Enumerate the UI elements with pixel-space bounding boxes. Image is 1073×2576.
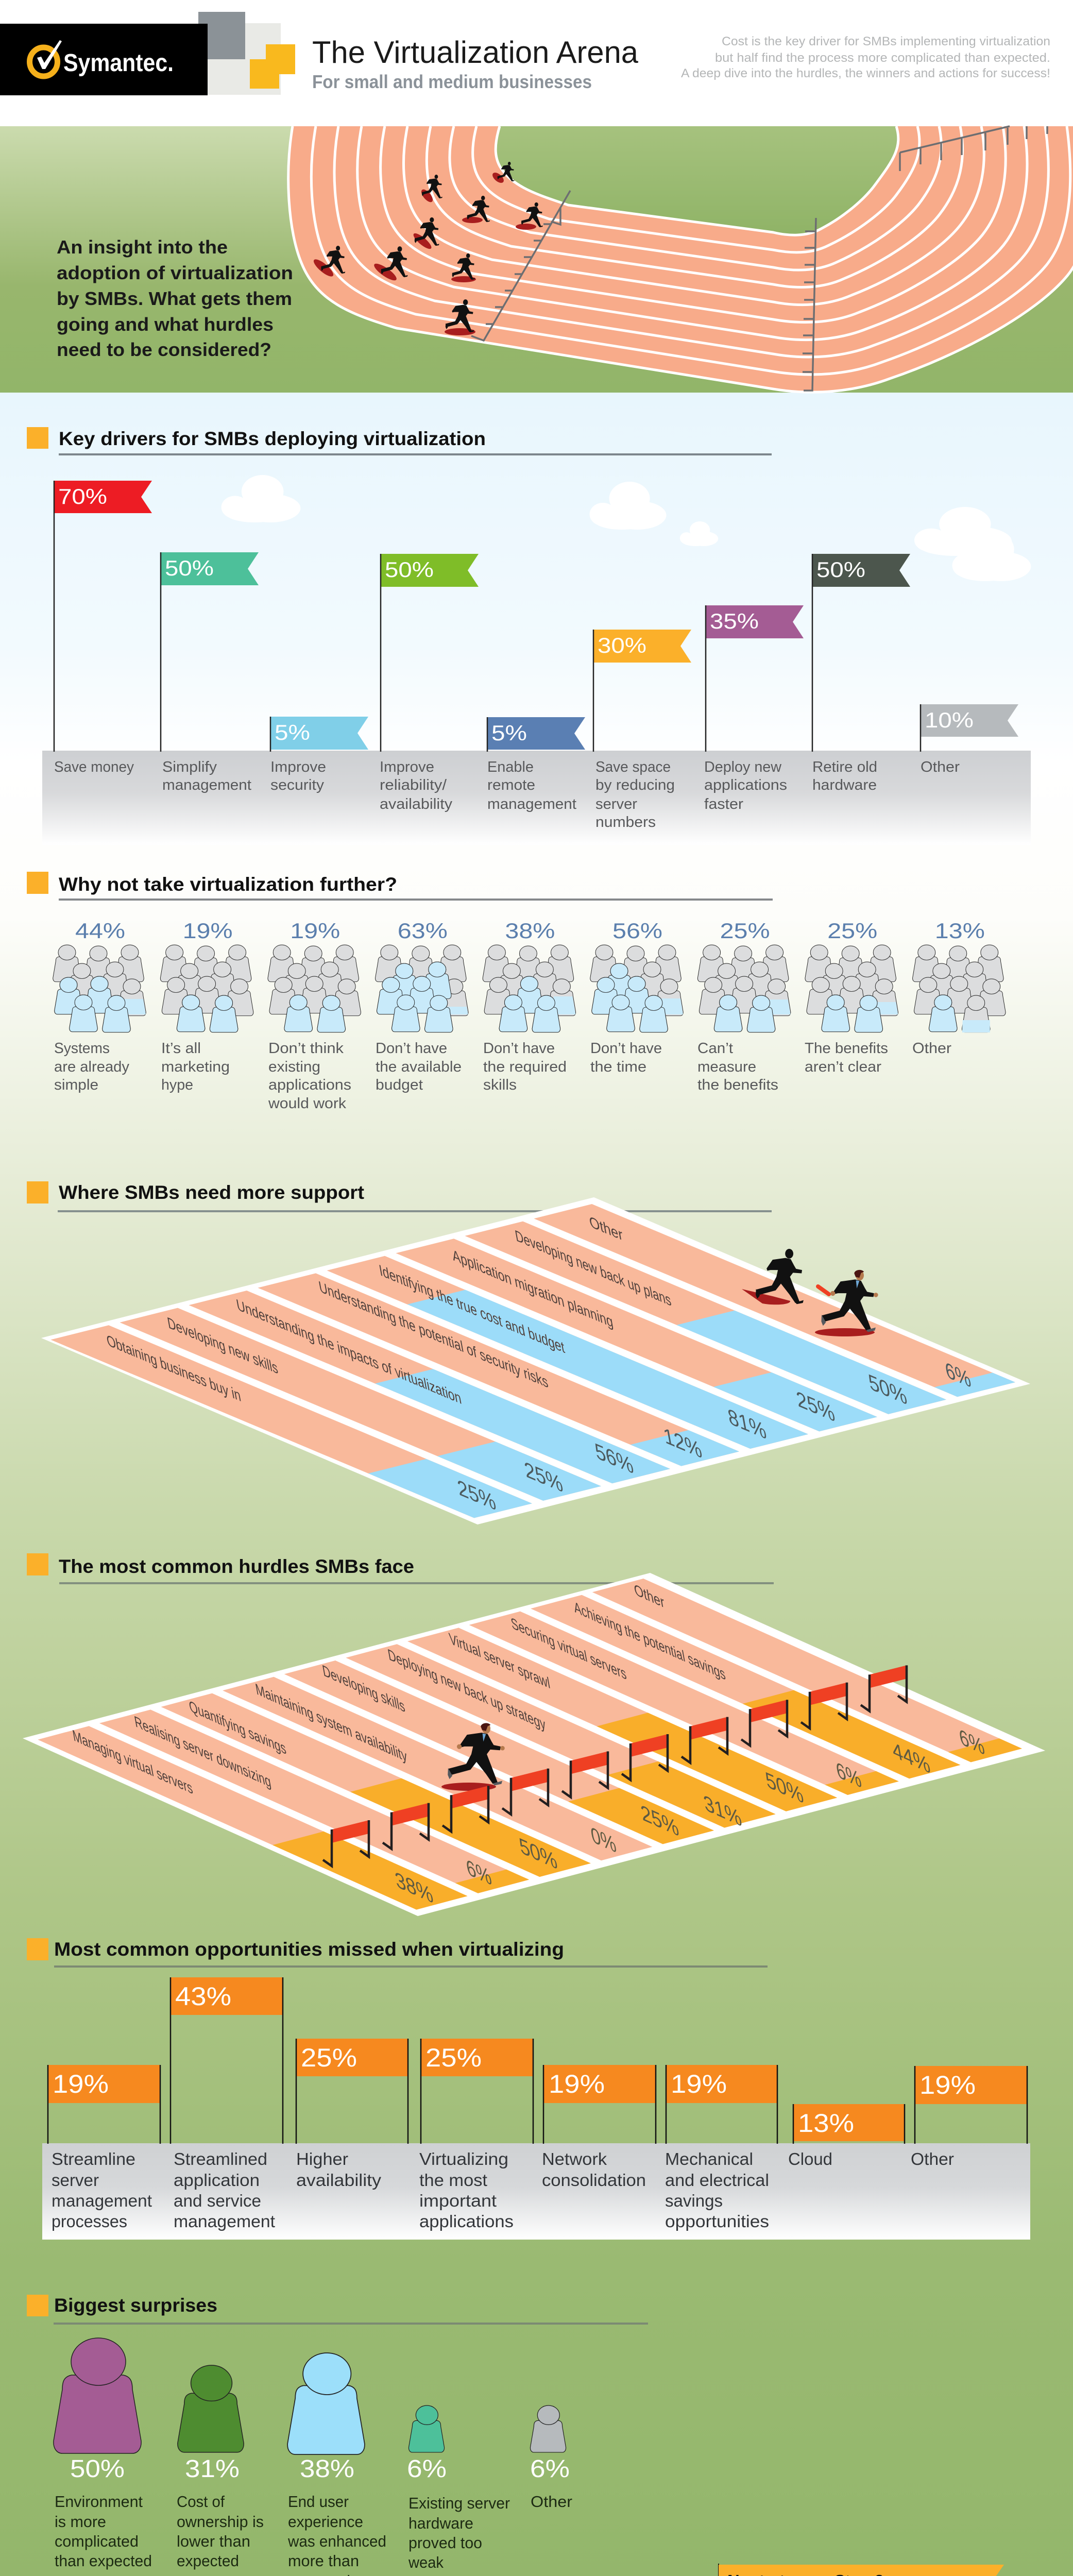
lane labels: Developing new back up plans — [514, 1227, 673, 1310]
lane percentages: 50% — [866, 1369, 909, 1410]
flag: save space 30%: 30% — [598, 633, 646, 657]
banner: mechanical and electrical 19% — [666, 2065, 777, 2144]
driver labels: numbers — [595, 814, 656, 831]
heading — [27, 1181, 772, 1212]
opportunity labels: and service — [174, 2191, 261, 2210]
people group 19% — [268, 919, 361, 1032]
surprise labels: experience — [288, 2513, 363, 2531]
section: key drivers — [27, 427, 1031, 845]
reason labels: simple — [54, 1077, 98, 1093]
people group 44% — [53, 919, 146, 1032]
banner: cloud 13% — [793, 2104, 905, 2144]
lane labels — [105, 1213, 673, 1408]
lane labels: Deploying new back up strategy — [386, 1646, 547, 1734]
opportunity labels: Cloud — [788, 2149, 832, 2168]
lane labels: Achieving the potential savings — [572, 1598, 727, 1684]
driver labels: server — [595, 796, 637, 812]
people group 56%: 56% — [612, 919, 662, 943]
people group 13%: 13% — [935, 919, 985, 943]
lane percentages: 6% — [464, 1855, 493, 1891]
clouds — [222, 475, 1031, 581]
figure: 38% end user experience: 38% — [300, 2455, 354, 2483]
banner: other 19%: 19% — [919, 2071, 976, 2099]
lane labels: Other — [633, 1581, 666, 1612]
reason labels: aren’t clear — [805, 1059, 881, 1075]
header — [0, 12, 1050, 95]
opportunity labels: management — [52, 2191, 152, 2210]
hurdler — [441, 1723, 505, 1791]
driver labels: Retire old — [812, 759, 877, 775]
people group 25%: 25% — [720, 919, 770, 943]
surprise labels: ownership is — [177, 2513, 264, 2531]
opportunity labels: server — [52, 2171, 99, 2190]
banner: streamline server 19%: 19% — [53, 2070, 109, 2098]
hero: running track — [0, 126, 1073, 393]
banner: mechanical and electrical 19%: 19% — [671, 2070, 727, 2098]
Symantec logo: Symantec. — [63, 49, 174, 77]
lane labels: Maintaining system availability — [254, 1680, 408, 1766]
opportunity labels: consolidation — [542, 2171, 646, 2190]
banner: virtualizing important apps 25% — [421, 2039, 533, 2144]
opportunity labels: Other — [911, 2149, 954, 2168]
opportunity labels: important — [419, 2191, 497, 2210]
lane percentages: 25% — [522, 1457, 565, 1498]
hurdle line right — [900, 126, 1047, 171]
opportunity labels: Higher — [296, 2149, 348, 2168]
driver labels: faster — [704, 796, 743, 812]
lane percentages: 0% — [589, 1822, 618, 1858]
reason labels: The benefits — [805, 1040, 888, 1057]
surprise labels: more than — [288, 2552, 359, 2570]
figure: 50% environment — [54, 2338, 141, 2483]
banner: cloud 13%: 13% — [798, 2109, 854, 2138]
hero intro text: adoption of virtualization — [57, 262, 293, 283]
driver labels: Save space — [595, 759, 671, 775]
grey base panel — [42, 751, 1031, 845]
lane percentages: 81% — [726, 1404, 769, 1445]
figure: 6% other: 6% — [530, 2455, 570, 2483]
step 3 flag — [719, 2565, 1004, 2576]
flag: improve reliability 50% — [381, 554, 479, 752]
flag: improve security 5% — [270, 717, 368, 752]
logo tiles — [198, 12, 295, 95]
reason labels: It’s all — [161, 1040, 201, 1057]
banner: network consolidation 19% — [543, 2065, 656, 2144]
people group 38%: 38% — [505, 919, 555, 943]
lane labels: Virtual server sprawl — [448, 1630, 551, 1692]
driver labels: applications — [704, 777, 787, 793]
surprise labels: than expected — [55, 2552, 152, 2570]
reason labels: would work — [268, 1095, 347, 1112]
lane percentages: 50% — [763, 1767, 806, 1809]
reason labels: marketing — [161, 1059, 230, 1075]
people group 19% — [160, 919, 253, 1032]
driver labels: security — [270, 777, 325, 793]
banner: other 19% — [915, 2066, 1027, 2144]
runners on track — [311, 162, 543, 335]
surprise labels: was enhanced — [287, 2532, 386, 2550]
next stage step 3 — [706, 2564, 1023, 2576]
opportunity labels: opportunities — [665, 2212, 769, 2231]
lane labels: Understanding the potential of security risks — [317, 1278, 550, 1392]
people group 63% — [376, 919, 468, 1032]
flag: simplify management 50% — [161, 552, 259, 752]
heading: The most common hurdles SMBs face — [59, 1556, 414, 1577]
hero intro text: by SMBs. What gets them — [57, 288, 292, 309]
grey base panel — [42, 2143, 1030, 2240]
track surface — [288, 126, 1073, 392]
lane percentages: 44% — [890, 1737, 932, 1779]
people group 63%: 63% — [398, 919, 448, 943]
opportunity labels: applications — [419, 2212, 514, 2231]
reason labels: Don’t think — [268, 1040, 344, 1057]
hurdle line middle — [803, 218, 816, 391]
people group 56% — [590, 919, 683, 1032]
isometric hurdles chart — [23, 1573, 1045, 1916]
lane labels: Understanding the impacts of virtualization — [235, 1296, 463, 1408]
surprise labels: Existing server — [408, 2494, 510, 2512]
driver labels: Deploy new — [704, 759, 782, 775]
lane labels: Securing virtual servers — [509, 1614, 628, 1683]
figure: 6% existing hardware: 6% — [407, 2455, 447, 2483]
opportunity labels: and electrical — [665, 2171, 769, 2190]
lane percentages: 6% — [957, 1724, 986, 1760]
lane labels: Obtaining business buy in — [105, 1331, 242, 1405]
reason labels: Don’t have — [483, 1040, 555, 1057]
hero intro text: going and what hurdles — [57, 314, 274, 335]
driver labels: management — [162, 777, 251, 793]
people group 25% — [805, 919, 898, 1032]
flag: remote management 5%: 5% — [491, 721, 527, 745]
surprise labels: Other — [531, 2493, 572, 2511]
people group 13% — [913, 919, 1006, 1032]
flag: save money 70% — [54, 481, 152, 752]
lane labels: Developing skills — [321, 1662, 406, 1716]
people group 25%: 25% — [827, 919, 877, 943]
surprise labels: expected — [177, 2552, 239, 2570]
flag: save money 70%: 70% — [58, 484, 107, 509]
hero intro text — [57, 236, 293, 360]
opportunity labels: Streamline — [52, 2149, 135, 2168]
opportunity labels: Virtualizing — [419, 2149, 508, 2168]
intro text: Cost is the key driver for SMBs implementing virtualization — [722, 35, 1050, 48]
driver labels: hardware — [812, 777, 877, 793]
Symantec logo — [0, 24, 208, 95]
flag: deploy applications 35%: 35% — [710, 609, 759, 633]
driver labels: Improve — [380, 759, 434, 775]
reason labels: Don’t have — [376, 1040, 447, 1057]
intro text: A deep dive into the hurdles, the winners and actions for success! — [681, 66, 1050, 80]
section: opportunities missed — [27, 1938, 1030, 2240]
section: why not take virtualization further — [27, 872, 1006, 1112]
heading: Key drivers for SMBs deploying virtualization — [59, 428, 486, 449]
flag: deploy applications 35% — [706, 605, 804, 752]
driver labels: Other — [921, 759, 960, 775]
heading — [27, 2295, 648, 2325]
opportunity labels: Network — [542, 2149, 607, 2168]
flag: improve reliability 50%: 50% — [385, 557, 434, 582]
lane percentages: 56% — [593, 1438, 636, 1479]
relay runners — [742, 1249, 878, 1336]
lane percentages: 6% — [943, 1358, 973, 1393]
heading: Where SMBs need more support — [59, 1182, 364, 1203]
hero intro text: need to be considered? — [57, 339, 271, 360]
lane labels: Realising server downsizing — [133, 1713, 272, 1791]
surprise labels: complicated — [55, 2532, 139, 2550]
figure: 31% cost of ownership: 31% — [185, 2455, 240, 2483]
flag: other 10%: 10% — [925, 708, 974, 732]
surprise labels: weak — [408, 2553, 444, 2571]
red hurdles — [323, 1665, 907, 1866]
surprise labels: lower than — [177, 2532, 250, 2550]
title: The Virtualization Arena — [312, 35, 639, 70]
surprise labels: End user — [288, 2493, 349, 2511]
opportunity labels: Mechanical — [665, 2149, 753, 2168]
figure: 6% other — [530, 2405, 570, 2483]
banner: streamlined application 43% — [171, 1977, 283, 2144]
section: most common hurdles — [23, 1553, 1045, 1916]
lane percentages — [455, 1358, 973, 1516]
opportunity labels: processes — [52, 2212, 127, 2231]
driver labels: reliability/ — [380, 777, 447, 793]
flag: retire hardware 50% — [812, 554, 910, 752]
surprise labels: Environment — [55, 2493, 143, 2511]
lane percentages: 31% — [702, 1790, 744, 1832]
driver labels: remote — [487, 777, 535, 793]
figure: 38% end user experience — [287, 2353, 365, 2483]
reason labels: Other — [912, 1040, 951, 1057]
driver labels: management — [487, 796, 576, 812]
reason labels: applications — [268, 1077, 351, 1093]
section: where SMBs need more support — [27, 1181, 1030, 1524]
people group 19%: 19% — [290, 919, 340, 943]
isometric lanes chart — [41, 1197, 1030, 1524]
people group 25% — [697, 919, 791, 1032]
surprise labels: is more — [55, 2513, 106, 2531]
heading: Biggest surprises — [54, 2295, 217, 2316]
figure: 50% environment: 50% — [70, 2455, 125, 2483]
reason labels: skills — [483, 1077, 517, 1093]
banner: streamline server 19% — [48, 2065, 160, 2144]
lane percentages: 25% — [455, 1475, 498, 1516]
heading — [27, 1553, 774, 1584]
opportunity labels — [52, 2149, 954, 2231]
reason labels: the benefits — [697, 1077, 778, 1093]
driver labels — [54, 759, 960, 831]
people group 38% — [483, 919, 576, 1032]
people group 44%: 44% — [75, 919, 125, 943]
reason labels: Don’t have — [590, 1040, 662, 1057]
section: biggest surprises — [27, 2295, 648, 2576]
opportunity labels: application — [174, 2171, 260, 2190]
flag: simplify management 50%: 50% — [165, 556, 214, 580]
flag: retire hardware 50%: 50% — [816, 557, 865, 582]
surprise labels: hardware — [408, 2514, 473, 2532]
heading: Why not take virtualization further? — [59, 874, 397, 895]
surprise labels — [55, 2493, 572, 2576]
reason labels: hype — [161, 1077, 193, 1093]
opportunity labels: Streamlined — [174, 2149, 267, 2168]
reason labels: measure — [697, 1059, 756, 1075]
heading — [27, 872, 773, 901]
lane lines — [288, 126, 1073, 392]
lane percentages: 12% — [661, 1423, 704, 1464]
driver labels: Save money — [54, 759, 134, 775]
banner: streamlined application 43%: 43% — [175, 1982, 231, 2011]
driver labels: Improve — [270, 759, 326, 775]
subtitle: For small and medium businesses — [312, 71, 592, 92]
lane labels: Quantifying savings — [188, 1697, 287, 1758]
driver labels: Enable — [487, 759, 534, 775]
lane percentages: 38% — [393, 1867, 435, 1909]
driver labels: Simplify — [162, 759, 217, 775]
banner: higher availability 25%: 25% — [301, 2043, 357, 2072]
opportunity labels: availability — [296, 2171, 382, 2190]
lane percentages: 25% — [639, 1800, 681, 1842]
reason labels: Systems — [54, 1040, 110, 1057]
heading: Most common opportunities missed when virtualizing — [54, 1939, 564, 1960]
lane labels: Managing virtual servers — [71, 1726, 194, 1798]
flag: remote management 5% — [487, 717, 585, 752]
surprise labels: proved too — [408, 2534, 482, 2552]
lane labels: Application migration planning — [451, 1246, 615, 1331]
lane percentages — [393, 1724, 986, 1909]
opportunity labels: savings — [665, 2191, 723, 2210]
reason labels: Can’t — [697, 1040, 733, 1057]
hero intro text: An insight into the — [57, 236, 228, 258]
flag: other 10% — [921, 704, 1018, 752]
reason labels: existing — [268, 1059, 320, 1075]
lane percentages: 25% — [794, 1386, 837, 1427]
reason labels: are already — [54, 1059, 129, 1075]
figure: 31% cost of ownership — [178, 2365, 244, 2483]
reason labels: the required — [483, 1059, 567, 1075]
hurdle line left — [471, 191, 570, 341]
reason labels: budget — [376, 1077, 423, 1093]
figure: 6% existing hardware — [407, 2405, 447, 2483]
lane labels: Other — [588, 1213, 624, 1244]
reason labels: the time — [590, 1059, 646, 1075]
reason labels — [54, 1040, 951, 1112]
banner: higher availability 25% — [296, 2039, 408, 2144]
intro text: but half find the process more complicated than expected. — [715, 51, 1050, 65]
flag: improve security 5%: 5% — [275, 720, 310, 744]
lane labels: Identifying the true cost and budget — [378, 1261, 566, 1357]
lane percentages: 6% — [834, 1757, 863, 1793]
opportunity labels: the most — [419, 2171, 487, 2190]
banner: virtualizing important apps 25%: 25% — [425, 2043, 482, 2072]
flag: save space 30% — [593, 630, 691, 752]
heading — [27, 427, 772, 455]
surprise labels: Cost of — [177, 2493, 225, 2511]
lane labels: Developing new skills — [166, 1314, 279, 1378]
lane labels — [71, 1581, 727, 1798]
opportunity labels: management — [174, 2212, 275, 2231]
intro text — [681, 35, 1050, 80]
banner: network consolidation 19%: 19% — [549, 2070, 605, 2098]
lane percentages: 50% — [517, 1833, 559, 1875]
driver labels: by reducing — [595, 777, 675, 793]
heading — [27, 1938, 768, 1968]
people group 19%: 19% — [183, 919, 233, 943]
driver labels: availability — [380, 796, 453, 812]
reason labels: the available — [376, 1059, 462, 1075]
